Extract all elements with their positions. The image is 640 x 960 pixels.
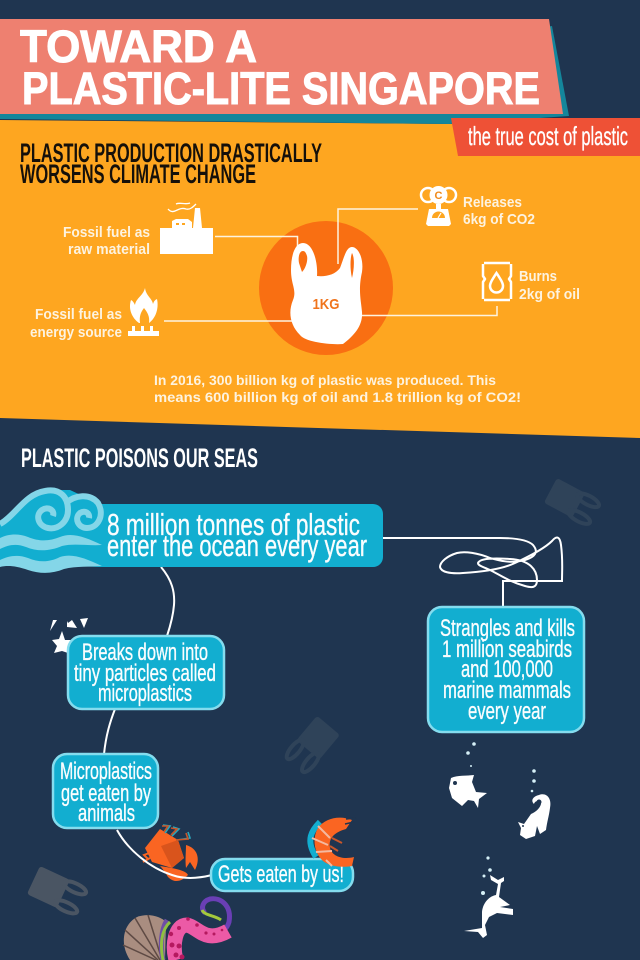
label: releases CO2: Releases [463, 194, 522, 211]
icon: shrimp [310, 818, 356, 867]
icon: crab [143, 825, 198, 881]
decorative bag centre [284, 716, 340, 775]
heading: climate change: WORSENS CLIMATE CHANGE [20, 159, 256, 189]
heading: poisons our seas: PLASTIC POISONS OUR SEAS [21, 443, 258, 473]
callout: eaten by animals: get eaten by [61, 780, 151, 807]
text block: 2016 plastic statistic: means 600 billion kg of oil and 1.8 trillion kg of CO2! [154, 389, 521, 405]
connector: flow curves [104, 567, 212, 878]
text block: 2016 plastic statistic [154, 372, 521, 405]
icon: fish [449, 742, 487, 808]
callout: breaks down: tiny particles called [74, 660, 216, 687]
callout: 8 million tonnes: enter the ocean every year [107, 528, 367, 563]
title banner: TOWARD A [20, 21, 257, 72]
icon: oil barrel [483, 263, 511, 300]
label: fossil fuel energy source [30, 306, 122, 341]
callout: eaten by animals [53, 754, 158, 828]
orange circle [259, 221, 393, 355]
callout: strangles and kills: 1 million seabirds [442, 636, 572, 663]
callout: strangles and kills: marine mammals [443, 677, 571, 704]
icon: scallop shell [123, 915, 167, 960]
label: fossil fuel raw material [63, 224, 150, 258]
label: releases CO2: 6kg of CO2 [463, 211, 535, 228]
label: fossil fuel energy source: energy source [30, 324, 122, 341]
icon: plastic shards star [50, 618, 88, 654]
label: fossil fuel raw material: raw material [68, 241, 150, 258]
decorative bag bottom left [27, 866, 88, 916]
icon: octopus tentacle [161, 899, 229, 960]
connector: entangling line [383, 538, 562, 606]
icon: plastic bag 1kg [290, 243, 362, 344]
text block: 2016 plastic statistic: In 2016, 300 billion kg of plastic was produced. This [154, 372, 496, 388]
callout: gets eaten by us [211, 859, 353, 891]
heading: climate change [20, 138, 322, 189]
icon: factory [160, 203, 213, 254]
label: burns oil [519, 268, 580, 303]
callout: 8 million tonnes: 8 million tonnes of plastic [107, 507, 360, 542]
callout: 8 million tonnes [0, 490, 383, 573]
heading: climate change: PLASTIC PRODUCTION DRASTICALLY [20, 138, 322, 168]
icon: CO2 scale [421, 186, 456, 226]
callout: eaten by animals: animals [78, 800, 135, 827]
icon: gas flame [128, 288, 159, 336]
callout: gets eaten by us: Gets eaten by us! [218, 861, 344, 888]
title banner: PLASTIC-LITE SINGAPORE [22, 63, 540, 114]
callout: strangles and kills: Strangles and kills [440, 615, 575, 642]
decorative bag top right [544, 478, 601, 527]
label: burns oil: Burns [519, 268, 557, 285]
label: fossil fuel energy source: Fossil fuel as [35, 306, 122, 323]
callout: eaten by animals: Microplastics [60, 758, 152, 785]
icon: seahorse [518, 769, 550, 839]
label: burns oil: 2kg of oil [519, 286, 580, 303]
icon: plastic bag 1kg: 1KG [312, 296, 340, 313]
connector lines [164, 209, 497, 321]
callout: strangles and kills: every year [468, 698, 546, 725]
label: releases CO2 [463, 194, 535, 228]
callout: strangles and kills: and 100,000 [461, 656, 553, 683]
title banner [0, 19, 569, 124]
callout: strangles and kills [428, 607, 584, 732]
icon: seabird [464, 856, 513, 938]
callout: breaks down: microplastics [98, 680, 192, 707]
icon: waves [0, 490, 102, 573]
label: fossil fuel raw material: Fossil fuel as [63, 224, 150, 241]
callout: breaks down [68, 636, 224, 709]
callout: breaks down: Breaks down into [82, 639, 208, 666]
panel: orange climate section [0, 118, 640, 438]
icon: CO2 scale: C [435, 190, 443, 202]
